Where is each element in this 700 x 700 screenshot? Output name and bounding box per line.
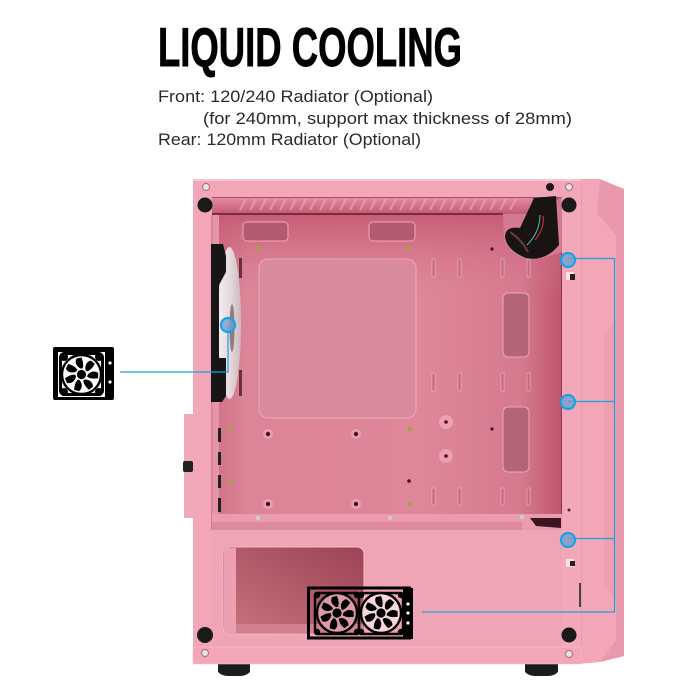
fan bbox=[211, 244, 242, 402]
description text: Front: 120/240 Radiator (Optional) bbox=[158, 87, 433, 106]
cable bundle bbox=[503, 196, 562, 259]
PSU shroud bbox=[212, 530, 562, 647]
front radiator icon bbox=[308, 588, 413, 639]
title: LIQUID COOLING bbox=[158, 16, 462, 78]
corner screws bbox=[202, 184, 572, 658]
motherboard cutout bbox=[259, 259, 416, 418]
PC case bbox=[183, 179, 624, 676]
bottom rail bbox=[212, 514, 562, 530]
description text: (for 240mm, support max thickness of 28mm) bbox=[203, 109, 572, 128]
case frame bbox=[193, 179, 581, 664]
right frame strip bbox=[562, 197, 581, 664]
description text: Rear: 120mm Radiator (Optional) bbox=[158, 130, 421, 149]
corner rubber bumpers bbox=[197, 183, 576, 643]
cable grommets bbox=[243, 222, 529, 472]
standoffs bbox=[228, 246, 494, 509]
callout lines bbox=[120, 258, 614, 612]
tray slots bbox=[432, 259, 530, 505]
rear radiator icon bbox=[53, 347, 114, 400]
callout markers bbox=[221, 253, 575, 547]
left frame edge bbox=[211, 215, 212, 530]
side tab bbox=[183, 414, 194, 518]
rear slot covers bbox=[218, 428, 221, 512]
interior tray bbox=[212, 197, 562, 531]
bottom frame bbox=[193, 647, 581, 664]
top vent bbox=[212, 197, 562, 215]
inner right edge bbox=[561, 250, 562, 530]
case feet bbox=[218, 662, 558, 676]
front panel bbox=[578, 179, 624, 664]
description text bbox=[158, 87, 572, 149]
